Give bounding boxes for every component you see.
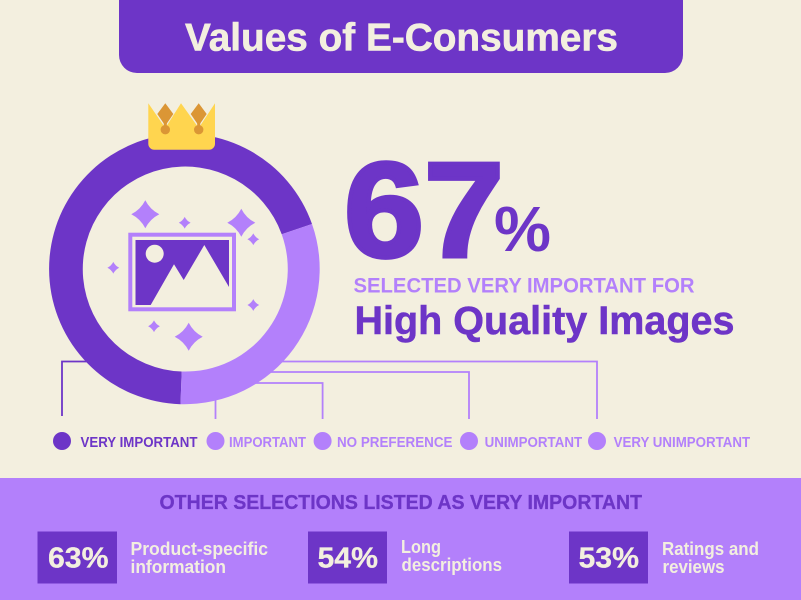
- icon: sparkling image: [107, 200, 259, 351]
- legend item: no preference: NO PREFERENCE: [337, 435, 453, 451]
- headline statistic: 67%: %: [494, 193, 551, 265]
- stat: ratings and reviews: Ratings and: [662, 538, 759, 559]
- panel heading: OTHER SELECTIONS LISTED AS VERY IMPORTANT: [160, 491, 642, 514]
- stat: long descriptions: [308, 532, 502, 584]
- legend item: important: [206, 432, 306, 451]
- legend item: very unimportant: VERY UNIMPORTANT: [614, 435, 750, 451]
- icon: crown: [148, 103, 215, 150]
- stat: long descriptions: descriptions: [402, 554, 502, 575]
- legend item: unimportant: UNIMPORTANT: [485, 435, 582, 451]
- legend item: very unimportant: [588, 432, 750, 451]
- statistic caption: SELECTED VERY IMPORTANT FOR: [354, 273, 695, 297]
- legend: [53, 432, 750, 451]
- donut chart: [49, 134, 320, 404]
- legend item: important: IMPORTANT: [229, 435, 306, 451]
- statistic caption: [354, 273, 734, 343]
- stat: product-specific information: 63%: [48, 543, 108, 575]
- legend item: no preference: [314, 432, 453, 451]
- legend connector lines: [62, 362, 597, 419]
- stat: ratings and reviews: 53%: [578, 543, 639, 575]
- legend item: very important: [53, 432, 198, 451]
- stat: ratings and reviews: [569, 532, 759, 584]
- legend item: unimportant: [460, 432, 582, 451]
- stat: product-specific information: [38, 532, 268, 584]
- stat: long descriptions: 54%: [318, 543, 378, 575]
- title banner: [119, 0, 683, 73]
- stat: ratings and reviews: reviews: [662, 556, 724, 577]
- stat: long descriptions: Long: [401, 536, 441, 557]
- stat: product-specific information: information: [130, 556, 226, 577]
- icon: sparkles: [107, 200, 259, 351]
- title banner: Values of E-Consumers: [185, 16, 618, 60]
- statistic caption: High Quality Images: [354, 299, 734, 343]
- icon: picture frame: [130, 235, 234, 309]
- legend item: very important: VERY IMPORTANT: [80, 435, 198, 451]
- stat: product-specific information: Product-specific: [130, 538, 268, 559]
- panel: other selections: [0, 478, 801, 600]
- headline statistic: 67%: 67: [344, 134, 504, 286]
